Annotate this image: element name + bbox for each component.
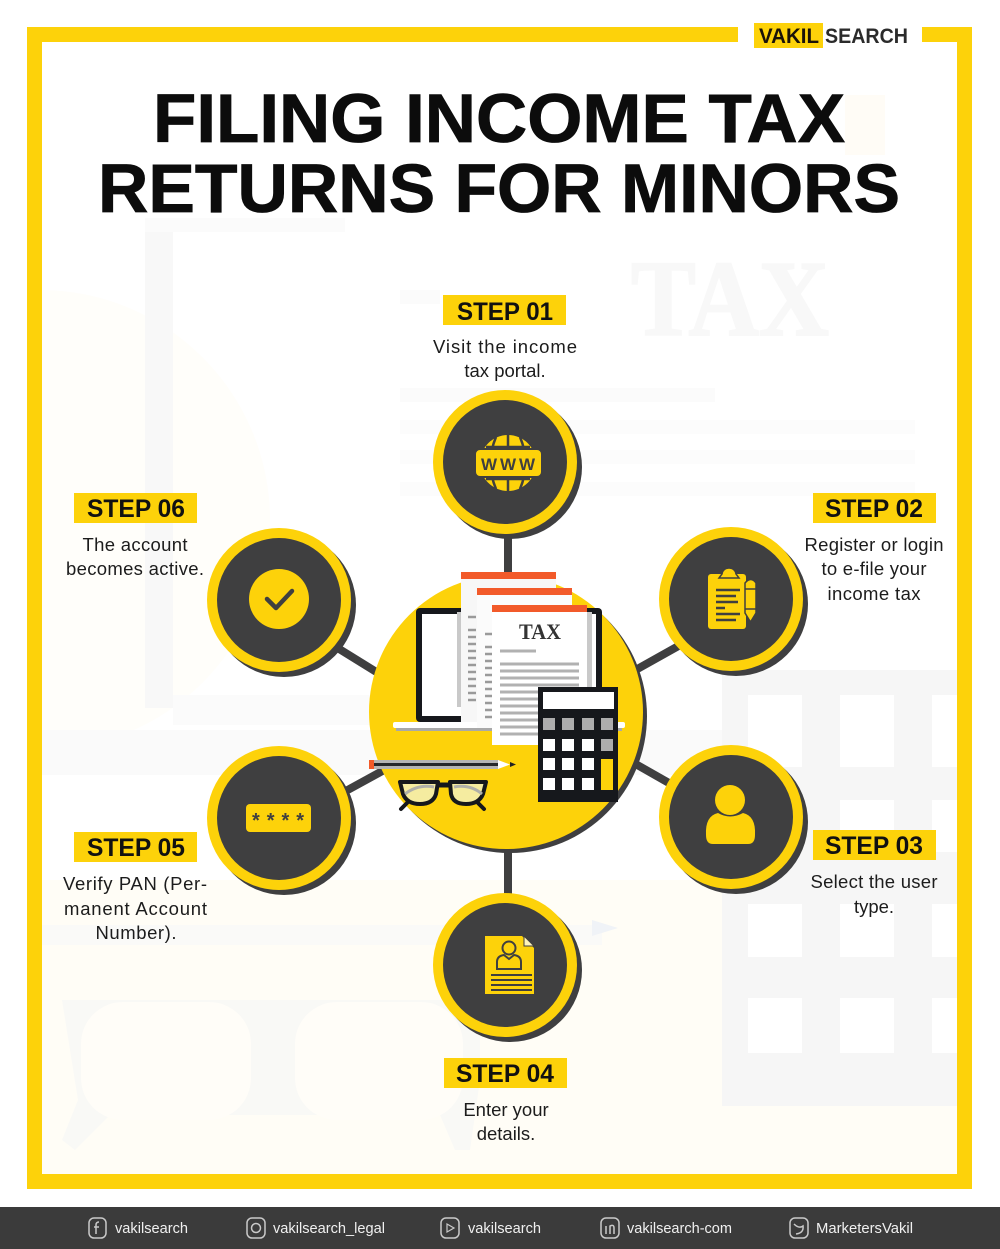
step 06 circle bbox=[207, 528, 356, 677]
step 05 heading: STEP 05 bbox=[87, 834, 185, 862]
step 03 bbox=[659, 745, 938, 917]
youtube link: vakilsearch bbox=[468, 1221, 541, 1237]
step 04 text: details. bbox=[477, 1123, 535, 1144]
step 03 text: Select the user bbox=[810, 871, 938, 892]
calculator bbox=[538, 687, 618, 802]
step 01 text bbox=[433, 336, 577, 381]
laptop bbox=[393, 608, 625, 731]
step 06 text: becomes active. bbox=[66, 558, 204, 579]
step 04 circle bbox=[433, 893, 582, 1042]
step 01 bbox=[433, 295, 582, 539]
step 01 heading: STEP 01 bbox=[457, 298, 553, 326]
icon: www globe bbox=[475, 435, 542, 491]
step 02 text bbox=[804, 534, 944, 604]
central illustration bbox=[369, 572, 647, 853]
linkedin link: vakilsearch-com bbox=[627, 1221, 732, 1237]
pencil bbox=[369, 760, 516, 769]
facebook link bbox=[89, 1218, 188, 1238]
step 02 circle bbox=[659, 527, 808, 676]
step 02 text: to e-file your bbox=[822, 558, 926, 579]
step 01 circle bbox=[433, 390, 582, 539]
step 02 heading: STEP 02 bbox=[825, 495, 923, 523]
step 05 circle bbox=[207, 746, 356, 895]
icon: user bbox=[706, 785, 755, 844]
step 05 bbox=[63, 746, 356, 943]
footer bar bbox=[0, 1207, 1000, 1249]
logo: Vakil Search: VAKIL bbox=[759, 25, 819, 48]
step 05 text bbox=[63, 873, 207, 943]
step 04 bbox=[433, 893, 582, 1144]
step 02 text: Register or login bbox=[804, 534, 944, 555]
youtube link bbox=[441, 1218, 541, 1238]
stacked papers: TAX bbox=[519, 619, 561, 644]
step 04 text bbox=[463, 1099, 549, 1144]
glasses bbox=[400, 782, 486, 809]
title: FILING INCOME TAX bbox=[153, 80, 845, 157]
twitter link: MarketersVakil bbox=[816, 1221, 913, 1237]
facebook link: vakilsearch bbox=[115, 1221, 188, 1237]
step 03 heading: STEP 03 bbox=[825, 832, 923, 860]
title: RETURNS FOR MINORS bbox=[98, 150, 900, 227]
logo: Vakil Search: SEARCH bbox=[825, 25, 908, 48]
icon: clipboard and pencil bbox=[708, 568, 756, 629]
step 01 text: Visit the income bbox=[433, 336, 577, 357]
icon: www globe: WWW bbox=[481, 455, 536, 474]
step 04 text: Enter your bbox=[463, 1099, 549, 1120]
step 05 text: Verify PAN (Per- bbox=[63, 873, 207, 894]
step 06 heading: STEP 06 bbox=[87, 495, 185, 523]
background watermark illustration: TAX bbox=[631, 240, 829, 359]
linkedin link bbox=[601, 1218, 732, 1238]
instagram link bbox=[247, 1218, 385, 1238]
stacked papers bbox=[457, 572, 592, 745]
step 03 circle bbox=[659, 745, 808, 894]
step 04 heading: STEP 04 bbox=[456, 1060, 554, 1088]
instagram link: vakilsearch_legal bbox=[273, 1221, 385, 1237]
connector lines bbox=[336, 530, 682, 897]
step 06 text bbox=[66, 534, 204, 579]
step 05 text: manent Account bbox=[64, 898, 207, 919]
twitter link bbox=[790, 1218, 913, 1238]
icon: password field: **** bbox=[252, 810, 304, 832]
step 03 text: type. bbox=[854, 896, 894, 917]
icon: password field bbox=[246, 804, 311, 832]
title bbox=[98, 80, 900, 227]
step 06 text: The account bbox=[82, 534, 188, 555]
step 02 bbox=[659, 493, 944, 676]
central yellow disc bbox=[369, 575, 647, 853]
step 06 bbox=[66, 493, 356, 677]
step 05 text: Number). bbox=[96, 922, 176, 943]
step 01 text: tax portal. bbox=[464, 360, 546, 381]
step 02 text: income tax bbox=[828, 583, 921, 604]
icon: resume document bbox=[485, 936, 534, 994]
logo: Vakil Search bbox=[754, 23, 908, 48]
step 03 text bbox=[810, 871, 938, 917]
icon: check mark bbox=[249, 569, 309, 629]
